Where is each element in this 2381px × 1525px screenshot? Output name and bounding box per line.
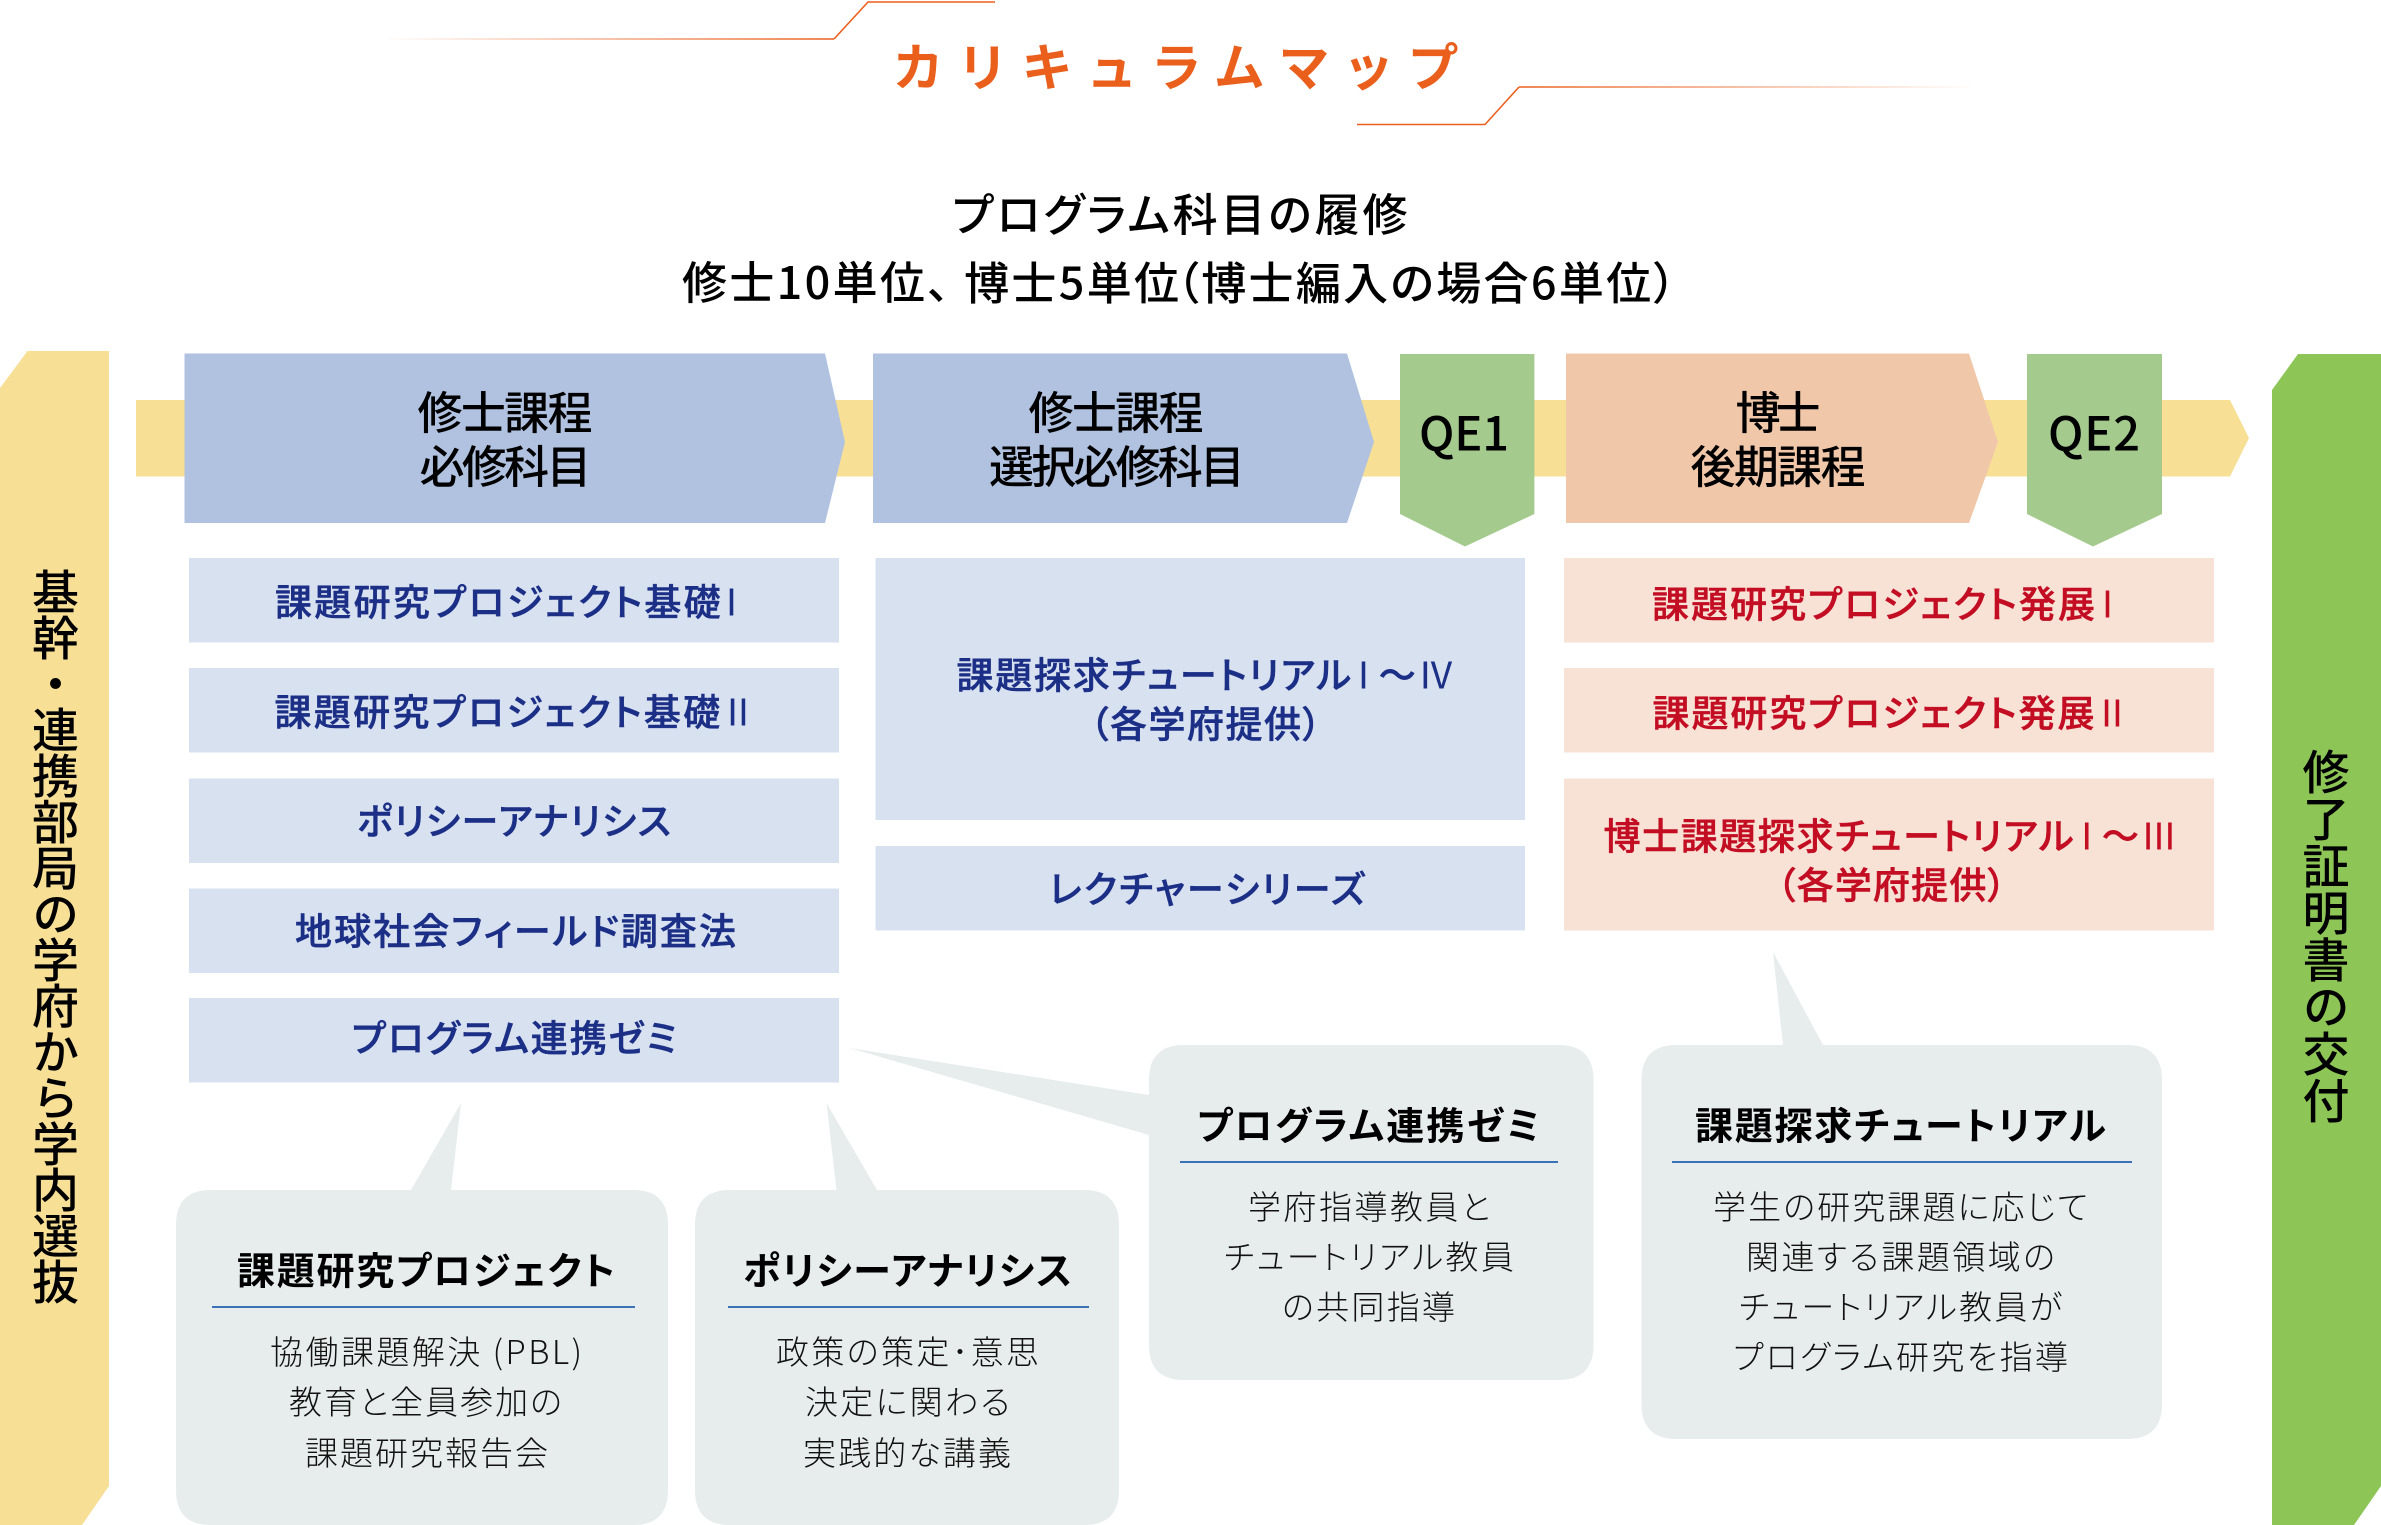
stage: master elective bbox=[873, 354, 1374, 523]
column: master elective subjects: 課題探求チュートリアルⅠ～Ⅳ bbox=[956, 646, 1454, 700]
left side bar: admission: 基幹・連携部局の学府から学内選抜 bbox=[21, 568, 90, 1305]
column: doctoral subjects: 課題研究プロジェクト発展Ⅰ bbox=[1652, 574, 2126, 628]
header decoration: right line bbox=[1357, 87, 1976, 124]
stage: master elective: 修士課程 bbox=[1028, 377, 1204, 442]
column: master elective subjects: レクチャーシリーズ bbox=[1049, 860, 1366, 914]
column: doctoral subjects: 課題研究プロジェクト発展Ⅱ bbox=[1652, 684, 2130, 738]
column: master required subjects: 課題研究プロジェクト基礎Ⅱ bbox=[274, 682, 756, 736]
marker: QE1 bbox=[1400, 354, 1534, 546]
column: doctoral subjects: （各学府提供） bbox=[1777, 856, 2006, 910]
callout: policy analysis bbox=[695, 1103, 1119, 1525]
callout: program seminar bbox=[850, 1045, 1594, 1380]
callout: tutorial bbox=[1642, 952, 2162, 1439]
callout: policy analysis: 政策の策定･意思 bbox=[776, 1326, 1039, 1374]
stage: doctoral: 博士 bbox=[1736, 377, 1820, 442]
callout: policy analysis: 決定に関わる bbox=[805, 1376, 1010, 1424]
callout: research project: 課題研究報告会 bbox=[305, 1427, 548, 1475]
callout: policy analysis: ポリシーアナリシス bbox=[743, 1240, 1072, 1296]
title: カリキュラムマップ bbox=[892, 27, 1458, 101]
callout: tutorial: 学生の研究課題に応じて bbox=[1713, 1181, 2088, 1229]
column: master required subjects: ポリシーアナリシス bbox=[357, 792, 671, 846]
column: master required subjects: 課題研究プロジェクト基礎Ⅰ bbox=[275, 572, 750, 626]
column: master required subjects: プログラム連携ゼミ bbox=[352, 1008, 677, 1062]
callout: tutorial: チュートリアル教員が bbox=[1739, 1281, 2063, 1329]
stage: master required bbox=[184, 354, 845, 523]
callout: policy analysis: 実践的な講義 bbox=[803, 1427, 1011, 1475]
marker: QE1: QE1 bbox=[1419, 396, 1509, 464]
callout: tutorial: 関連する課題領域の bbox=[1746, 1231, 2055, 1279]
callout: tutorial: プログラム研究を指導 bbox=[1733, 1331, 2068, 1379]
subtitle: プログラム科目の履修 bbox=[952, 179, 1408, 244]
column: doctoral subjects bbox=[1564, 558, 2214, 930]
callout: program seminar: の共同指導 bbox=[1282, 1281, 1455, 1329]
subtitle: 修士10単位、 博士5単位（博士編入の場合6単位） bbox=[682, 247, 1676, 312]
stage: doctoral: 後期課程 bbox=[1690, 431, 1866, 496]
subtitle bbox=[682, 179, 1676, 312]
progress band arrow bbox=[136, 400, 2249, 476]
callout: research project: 課題研究プロジェクト bbox=[237, 1240, 615, 1296]
stage: doctoral bbox=[1566, 354, 1998, 523]
callout: research project: 協働課題解決 (PBL) bbox=[270, 1326, 582, 1374]
column: master elective subjects: （各学府提供） bbox=[1090, 694, 1321, 748]
column: doctoral subjects: 博士課題探求チュートリアルⅠ～Ⅲ bbox=[1604, 806, 2178, 860]
callout: program seminar: チュートリアル教員 bbox=[1224, 1231, 1514, 1279]
callout: research project bbox=[176, 1103, 668, 1525]
right side bar: certificate: 修了証明書の交付 bbox=[2292, 748, 2360, 1124]
callout: program seminar: 学府指導教員と bbox=[1248, 1181, 1490, 1229]
callout: program seminar: プログラム連携ゼミ bbox=[1197, 1096, 1540, 1150]
callout: tutorial: 課題探求チュートリアル bbox=[1695, 1096, 2106, 1150]
column: master elective subjects bbox=[876, 558, 1525, 930]
left side bar: admission bbox=[0, 351, 109, 1525]
stage: master elective: 選択必修科目 bbox=[989, 431, 1245, 496]
marker: QE2 bbox=[2027, 354, 2162, 546]
stage: master required: 必修科目 bbox=[420, 431, 592, 496]
callout: research project: 教育と全員参加の bbox=[289, 1376, 562, 1424]
column: master required subjects bbox=[189, 558, 839, 1082]
stage: master required: 修士課程 bbox=[418, 377, 592, 442]
marker: QE2: QE2 bbox=[2048, 396, 2140, 464]
right side bar: certificate bbox=[2272, 354, 2381, 1525]
header decoration: left line bbox=[383, 2, 995, 39]
column: master required subjects: 地球社会フィールド調査法 bbox=[295, 902, 736, 956]
